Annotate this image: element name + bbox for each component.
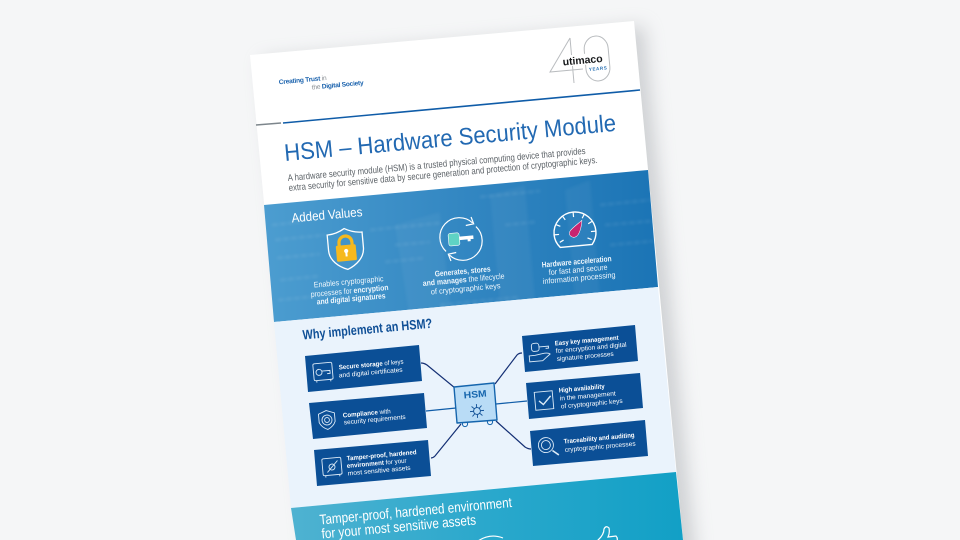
icon: speedometer	[552, 210, 597, 248]
text: hardware acceleration	[541, 254, 616, 286]
text: hardware acceleration: Hardware acceleration	[541, 254, 612, 269]
box: traceability	[530, 420, 648, 466]
tagline: the Digital Society	[312, 80, 364, 91]
icon: shield with padlock	[327, 227, 365, 271]
heading: why implement: Why implement an HSM?	[302, 316, 433, 342]
box: secure storage: Secure storage of keys	[339, 359, 405, 371]
text: key lifecycle: Generates, stores	[434, 264, 491, 278]
tagline: Creating Trust in	[279, 75, 327, 86]
text: hardware acceleration: information processing	[542, 270, 616, 286]
box: traceability: cryptographic processes	[565, 441, 637, 454]
text: cryptographic processes: processes for encryption	[310, 283, 389, 299]
text: cryptographic processes: Enables cryptographic	[313, 274, 384, 289]
document page	[250, 21, 683, 540]
box: easy key management: Easy key management	[555, 335, 620, 347]
panel: added values	[264, 170, 658, 322]
box: secure storage	[305, 345, 422, 392]
box: high availability: High availability	[559, 383, 605, 394]
icon: safe outline	[478, 536, 503, 540]
icon: central HSM safe	[454, 383, 497, 427]
box: high availability: in the management	[560, 390, 616, 402]
box: easy key management	[522, 325, 638, 372]
box: compliance: security requirements	[344, 414, 407, 426]
logo: utimaco 40 years	[550, 35, 611, 83]
box: tamper-proof: Tamper-proof, hardened	[347, 449, 417, 462]
box: compliance: Compliance with	[343, 408, 391, 419]
icon: key in rotating arrows	[438, 216, 484, 262]
text: key lifecycle: of cryptographic keys	[430, 281, 501, 296]
box: easy key management: signature processes	[557, 351, 615, 363]
connector lines	[421, 353, 531, 458]
box: tamper-proof: environment for your	[347, 458, 408, 470]
box: easy key management: for encryption and digital	[556, 342, 627, 355]
intro text: extra security for sensitive data by secure generation and protection of cryptographic keys.	[288, 154, 598, 193]
logo: utimaco 40 years: YEARS	[589, 65, 607, 72]
icon: central HSM safe: HSM	[463, 388, 487, 401]
header rule	[256, 90, 640, 125]
tagline	[279, 75, 364, 91]
page shadow	[262, 26, 696, 540]
box: secure storage: and digital certificates	[339, 367, 404, 379]
text: cryptographic processes: and digital signatures	[316, 291, 386, 306]
title: HSM – Hardware Security Module	[283, 110, 617, 167]
text: cryptographic processes	[310, 274, 389, 306]
heading: tamper-proof: Tamper-proof, hardened environment	[319, 494, 513, 527]
panel: why implement an HSM	[274, 287, 676, 508]
panel: tamper-proof environment	[291, 472, 683, 540]
heading: tamper-proof	[319, 494, 513, 540]
box: compliance	[309, 393, 427, 439]
icon: thumbs up	[597, 527, 617, 540]
text: key lifecycle	[422, 264, 505, 296]
heading: added values: Added Values	[291, 204, 363, 225]
intro text: A hardware security module (HSM) is a trusted physical computing device that provides	[287, 145, 586, 183]
box: high availability: of cryptographic keys	[561, 398, 624, 410]
text: key lifecycle: and manages the lifecycle	[422, 272, 505, 288]
logo: utimaco 40 years: utimaco	[562, 53, 603, 68]
box: tamper-proof: most sensitive assets	[348, 465, 412, 477]
box: tamper-proof	[314, 440, 431, 486]
box: high availability	[526, 373, 643, 419]
box: traceability: Traceability and auditing	[564, 432, 635, 445]
text: hardware acceleration: for fast and secure	[548, 263, 608, 277]
